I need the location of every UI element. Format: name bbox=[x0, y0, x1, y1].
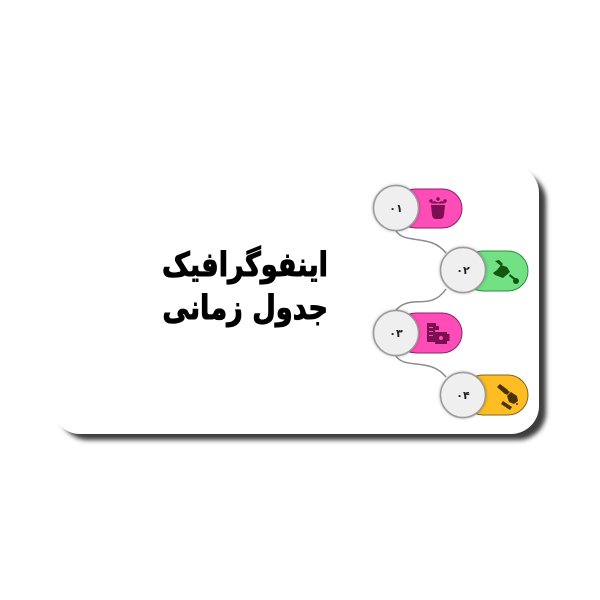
title bbox=[162, 245, 328, 328]
pill 03 bbox=[396, 313, 462, 353]
pill 02 bbox=[463, 251, 528, 291]
step 03 bbox=[373, 310, 462, 356]
icon: document and mug bbox=[427, 323, 450, 344]
number circle 02 bbox=[440, 248, 486, 292]
pill 01 bbox=[396, 189, 462, 228]
label 04: ۰۴ bbox=[456, 389, 470, 402]
connector lines bbox=[396, 231, 446, 377]
number circle 01 bbox=[374, 186, 418, 230]
icon: tools bbox=[497, 384, 518, 410]
title: جدول زمانی bbox=[162, 289, 328, 328]
title: اینفوگرافیک bbox=[162, 245, 328, 285]
number circle 03 bbox=[374, 310, 418, 356]
label 01: ۰۱ bbox=[389, 202, 403, 215]
panel: card shadow bbox=[60, 173, 546, 440]
label 02: ۰۲ bbox=[456, 264, 470, 277]
label 03: ۰۳ bbox=[389, 327, 403, 340]
icon: paint brush bbox=[493, 260, 519, 284]
icon: flower pot bbox=[429, 197, 447, 219]
step 02 bbox=[440, 247, 528, 293]
step 01 bbox=[373, 185, 462, 231]
panel: white card bbox=[52, 165, 539, 434]
number circle 04 bbox=[440, 372, 486, 418]
pill 04 bbox=[463, 375, 528, 415]
step 04 bbox=[440, 372, 528, 418]
